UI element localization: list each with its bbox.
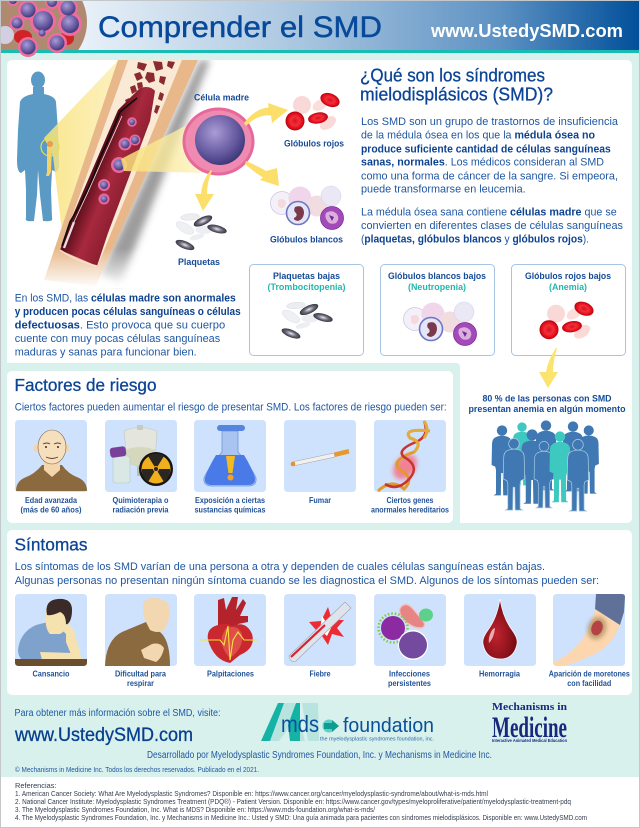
- statistic: anemia: [468, 394, 626, 414]
- label: (más de 60 años): [20, 505, 82, 514]
- label: [371, 496, 449, 514]
- panel: risk factors: [7, 371, 453, 523]
- developed by: Desarrollado por Myelodysplastic Syndromes Foundation, Inc. y Mechanisms in Medicine Inc.: [147, 750, 492, 761]
- copyright: © Mechanisms in Medicine Inc. Todos los derechos reservados. Publicado en el 2021.: [15, 765, 259, 774]
- references: Referencias:: [15, 781, 56, 790]
- icon: bleeding: [464, 594, 536, 666]
- icon: marrow cells artwork: [0, 0, 90, 57]
- label: Infecciones: [389, 670, 430, 679]
- small stem cells: [98, 117, 140, 204]
- white cells: [270, 186, 344, 230]
- label: Exposición a ciertas: [195, 496, 265, 505]
- text block: definition: como una forma de cáncer de la sangre. Si empeora,: [361, 170, 618, 182]
- card: low white cells: (Neutropenia): [408, 282, 466, 292]
- footer: more information: [14, 708, 221, 746]
- text block: symptoms intro: Los síntomas de los SMD varían de una persona a otra y dependen de cuales células sanguíneas están bajas.: [15, 561, 545, 573]
- logo: MDS Foundation: foundation: [343, 714, 434, 737]
- icon: shortness of breath: [105, 594, 177, 666]
- label: Aparición de moretones: [549, 670, 630, 679]
- label: platelets: Plaquetas: [178, 257, 220, 267]
- footer: more information: Para obtener más información sobre el SMD, visite:: [14, 708, 220, 719]
- icon: chemo or radiation: [105, 420, 177, 492]
- text block: definition: produce suficiente cantidad de células sanguíneas: [361, 143, 611, 155]
- website url: www.UstedySMD.com: [430, 20, 623, 41]
- yellow zoom wedge to bone: [44, 60, 128, 232]
- statistic: anemia: 80 % de las personas con SMD: [482, 394, 612, 404]
- label: Edad avanzada: [25, 496, 77, 505]
- header banner: [0, 0, 640, 57]
- icon: fatigue: [15, 594, 87, 666]
- card: low red cells: [512, 264, 626, 356]
- icon: fever: [284, 594, 356, 666]
- heading: what are MDS: mielodisplásicos (SMD)?: [360, 85, 553, 105]
- title: Comprender el SMD: [98, 11, 382, 44]
- label: respirar: [127, 679, 155, 688]
- label: Fiebre: [310, 670, 331, 679]
- icon: older age: [15, 420, 87, 492]
- icon: infections: [374, 594, 446, 666]
- icon: chemicals: [194, 420, 266, 492]
- bone cross section: [30, 60, 210, 288]
- card: low red cells: Glóbulos rojos bajos: [525, 271, 611, 281]
- icon: easy bruising: [553, 594, 625, 666]
- stem cell: [182, 108, 254, 176]
- label: [388, 670, 431, 688]
- logo: Mechanisms in Medicine: Interactive Animated Medical Education: [492, 738, 567, 743]
- text block: abnormal stem cells: En los SMD, las células madre son anormales: [15, 293, 236, 305]
- label: white cells: Glóbulos blancos: [270, 234, 343, 244]
- label: [112, 496, 169, 514]
- references: 1. American Cancer Society: What Are Myelodysplastic Syndromes? Disponible en: https://www.cancer.org/cancer/myelodysplastic-syndrome/about/what-is-mds.html: [15, 789, 488, 798]
- label: persistentes: [388, 679, 431, 688]
- label: [20, 496, 82, 514]
- label: Cansancio: [32, 670, 70, 679]
- label: Ciertos genes: [386, 496, 434, 505]
- text block: abnormal stem cells: cuente con muy pocas células sanguíneas: [15, 333, 221, 345]
- card: low platelets: (Trombocitopenia): [268, 282, 346, 292]
- logo: MDS Foundation: mds: [281, 711, 319, 737]
- label: [115, 670, 166, 688]
- text block: stem cells: (plaquetas, glóbulos blancos y glóbulos rojos).: [361, 233, 589, 245]
- text block: definition: [361, 116, 619, 196]
- label: radiación previa: [112, 505, 169, 514]
- heading: symptoms: Síntomas: [14, 535, 88, 555]
- card: low platelets: [250, 264, 364, 356]
- references: 3. The Myelodysplastic Syndromes Foundation, Inc. What is MDS? Disponible en: https://www.mds-foundation.org/what-is-mds/: [15, 805, 376, 814]
- icon: genes: [374, 420, 446, 492]
- red cells: [286, 90, 342, 133]
- arrow to statistic: [539, 348, 558, 388]
- text block: definition: sanas, normales. Los médicos consideran al SMD: [361, 157, 604, 169]
- label: red cells: Glóbulos rojos: [284, 138, 344, 148]
- references: [0, 777, 640, 828]
- text block: stem cells: La médula ósea sana contiene células madre que se: [361, 207, 617, 219]
- logo: Mechanisms in Medicine: Mechanisms in: [492, 701, 567, 713]
- text block: stem cells: convierten en diferentes clases de células sanguíneas: [361, 220, 623, 232]
- text block: abnormal stem cells: defectuosas. Esto provoca que su cuerpo: [15, 319, 225, 331]
- logo: Mechanisms in Medicine: Medicine: [492, 711, 567, 744]
- icon: palpitations: [194, 594, 266, 666]
- label: Hemorragia: [479, 670, 520, 679]
- logo: MDS Foundation: [261, 703, 434, 742]
- text block: definition: Los SMD son un grupo de trastornos de insuficiencia: [361, 116, 619, 128]
- text block: definition: de la médula ósea en los que la médula ósea no: [361, 130, 595, 142]
- label: sustancias químicas: [194, 505, 266, 514]
- label: stem cell: Célula madre: [194, 92, 249, 102]
- text block: definition: puede transformarse en leucemia.: [361, 184, 526, 196]
- label: anormales hereditarios: [371, 505, 449, 514]
- teal backing around risk factors: [0, 363, 460, 530]
- label: Dificultad para: [115, 670, 166, 679]
- yellow zoom wedge to stem cell: [121, 122, 210, 173]
- platelets: [174, 213, 228, 252]
- panel: what are MDS: [7, 60, 632, 523]
- label: Quimioterapia o: [112, 496, 168, 505]
- arrow to platelets: [195, 170, 214, 211]
- label: Palpitaciones: [207, 670, 254, 679]
- label: [194, 496, 266, 514]
- heading: what are MDS: ¿Qué son los síndromes: [360, 66, 545, 86]
- label: con facilidad: [567, 679, 611, 688]
- text block: risk intro: Ciertos factores pueden aumentar el riesgo de presentar SMD. Los factores de riesgo pueden ser:: [15, 402, 447, 414]
- heading: risk factors: Factores de riesgo: [14, 375, 156, 395]
- card: low red cells: (Anemia): [549, 282, 587, 292]
- text block: symptoms intro: Algunas personas no presentan ningún síntoma cuando se les diagnostica el SMD. Algunos de los síntomas pueden ser:: [15, 575, 599, 587]
- panel: symptoms: [7, 530, 632, 695]
- footer url: www.UstedySMD.com: [14, 724, 193, 746]
- statistic: anemia: presentan anemia en algún momento: [468, 404, 626, 414]
- body silhouette: [17, 72, 59, 221]
- card: low white cells: Glóbulos blancos bajos: [388, 271, 486, 281]
- text block: abnormal stem cells: [15, 293, 241, 358]
- people group: [492, 420, 599, 511]
- label: [549, 670, 630, 688]
- card: low white cells: [380, 264, 494, 356]
- text block: symptoms intro: [15, 561, 599, 587]
- icon: femur highlight: [41, 138, 59, 176]
- text block: abnormal stem cells: y producen pocas células sanguíneas o células: [15, 306, 241, 318]
- arrow to white cells: [245, 161, 279, 186]
- icon: smoking: [284, 420, 356, 492]
- arrow to red cells: [244, 103, 288, 126]
- label: Fumar: [309, 496, 332, 505]
- card: low platelets: Plaquetas bajas: [273, 271, 340, 281]
- references: 2. National Cancer Institute: Myelodysplastic Syndromes Treatment (PDQ®) - Patient Version. Disponible en: https://www.cancer.gov/types/myeloproliferative/patient/myelodysplastic-treatment-pdq: [15, 797, 571, 806]
- logo: MDS Foundation: the myelodysplastic syndromes foundation, inc.: [320, 736, 434, 742]
- heading: what are MDS: [360, 66, 553, 105]
- text block: stem cells: [361, 207, 623, 245]
- logo: Mechanisms in Medicine: [492, 701, 567, 744]
- text block: abnormal stem cells: maduras y sanas para funcionar bien.: [15, 346, 197, 358]
